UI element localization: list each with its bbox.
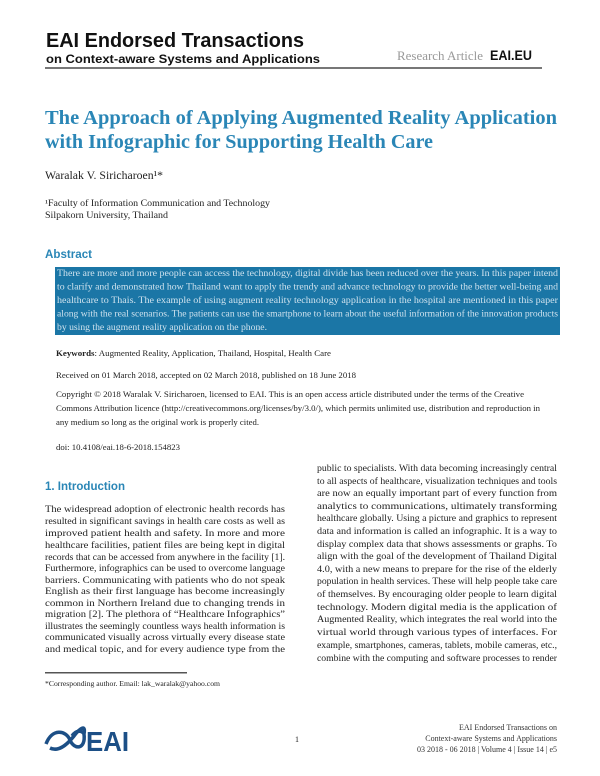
abstract box: There are more and more people can access the technology, digital divide has been reduced over the years. In this paper intend xyxy=(57,268,559,278)
metadata xyxy=(56,348,541,452)
right column text: of themselves. By encouraging older people to learn digital xyxy=(317,589,557,600)
right column text: virtual world through various types of interfaces. For xyxy=(317,627,558,638)
affiliation xyxy=(45,198,271,220)
right column text: to all aspects of healthcare, visualization techniques and tools xyxy=(317,476,557,487)
abstract box: healthcare to Thais. The example of using augment reality technology application in the hospital are mentioned in this paper xyxy=(57,295,558,305)
title: The Approach of Applying Augmented Reality Application xyxy=(45,107,557,129)
affiliation: Silpakorn University, Thailand xyxy=(45,210,169,220)
left column text: records that can be accessed from anywhere in the facility [1]. xyxy=(45,552,285,563)
footer citation: 03 2018 - 06 2018 | Volume 4 | Issue 14 | e5 xyxy=(417,745,557,754)
left column text: improved patient health and safety. In more and more xyxy=(45,528,285,539)
metadata: Commons Attribution licence (http://creativecommons.org/licenses/by/3.0/), which permits unlimited use, distribution and reproduction in xyxy=(56,403,541,413)
abstract box: by using the augment reality application on the phone. xyxy=(57,322,267,332)
left column text xyxy=(45,504,285,655)
left column text: Furthermore, infographics can be used to overcome language xyxy=(45,563,285,574)
logo: EAI: EAI xyxy=(86,726,129,757)
right column text: population in health services. These will help people take care xyxy=(317,577,557,587)
title: with Infographic for Supporting Health Care xyxy=(45,131,433,153)
metadata: any medium so long as the original work is properly cited. xyxy=(56,417,259,427)
right column text: example, smartphones, cameras, tablets, mobile cameras, etc., xyxy=(317,641,557,651)
affiliation: ¹Faculty of Information Communication and Technology xyxy=(45,198,271,208)
EAI.EU: EAI.EU xyxy=(490,47,532,63)
metadata: doi: 10.4108/eai.18-6-2018.154823 xyxy=(56,442,180,452)
right column text: display complex data that shows assessments or graphs. To xyxy=(317,540,557,550)
journal subtitle: on Context-aware Systems and Applications xyxy=(46,52,320,66)
header xyxy=(45,30,542,69)
right column text xyxy=(317,464,558,664)
metadata: Copyright © 2018 Waralak V. Siricharoen, licensed to EAI. This is an open access article distributed under the terms of the Creative xyxy=(56,389,524,399)
right column text: combine with the computing and software processes to render xyxy=(317,653,558,664)
left column text: common in Northern Ireland due to changing trends in xyxy=(45,599,285,609)
footer citation: EAI Endorsed Transactions on xyxy=(459,723,557,732)
right column text: align with the goal of the development of Thailand Digital xyxy=(317,551,557,562)
metadata: Keywords: Augmented Reality, Application, Thailand, Hospital, Health Care xyxy=(56,348,331,358)
abstract box: to clarify and demonstrated how Thailand want to apply the trendy and advance technology to provide the better well-being and xyxy=(57,282,559,292)
right column text: 4.0, with a new means to prepare for the rise of the elderly xyxy=(317,564,557,575)
left column text: communicated visually across virtually every disease state xyxy=(45,633,285,643)
page number: 1 xyxy=(295,735,299,744)
right column text: analytics to communications, ultimately transforming xyxy=(317,501,557,512)
footer citation xyxy=(417,723,557,754)
right column text: are now an equally important part of every function from xyxy=(317,488,558,499)
left column text: healthcare facilities, patient files are being kept in digital xyxy=(45,540,285,551)
intro heading: 1. Introduction xyxy=(45,479,125,493)
left column text: English as their first language has become increasingly xyxy=(45,586,285,597)
author: Waralak V. Siricharoen¹* xyxy=(45,170,163,182)
left column text: illustrates the seemingly countless ways health information is xyxy=(45,621,285,632)
abstract heading: Abstract xyxy=(45,247,92,261)
research article label: Research Article xyxy=(397,49,483,63)
footer citation: Context-aware Systems and Applications xyxy=(425,734,557,743)
left column text: resulted in significant savings in health care costs as well as xyxy=(45,516,285,527)
journal title: EAI Endorsed Transactions xyxy=(46,30,304,52)
logo: EAI xyxy=(46,726,129,757)
left column text: barriers. Communicating with patients who do not speak xyxy=(45,576,285,586)
metadata: Received on 01 March 2018, accepted on 02 March 2018, published on 18 June 2018 xyxy=(56,370,356,380)
right column text: data and information is called an infographic. It is a way to xyxy=(317,526,557,537)
left column text: migration [2]. The plethora of “Healthcare Infographics” xyxy=(45,609,285,620)
title xyxy=(45,107,557,153)
footnote: *Corresponding author. Email: lak_waralak@yahoo.com xyxy=(45,679,220,688)
right column text: public to specialists. With data becoming increasingly central xyxy=(317,464,557,474)
abstract box: along with the real scenarios. The patients can use the smartphone to learn about the useful information of the innovation products xyxy=(57,308,559,318)
abstract box xyxy=(55,267,560,335)
right column text: healthcare globally. Using a picture and graphics to represent xyxy=(317,514,557,524)
left column text: and medical topic, and for every audience type from the xyxy=(45,644,285,655)
right column text: technology. Modern digital media is the application of xyxy=(317,602,558,613)
left column text: The widespread adoption of electronic health records has xyxy=(45,504,285,515)
right column text: Augmented Reality, which integrates the real world into the xyxy=(317,615,557,625)
